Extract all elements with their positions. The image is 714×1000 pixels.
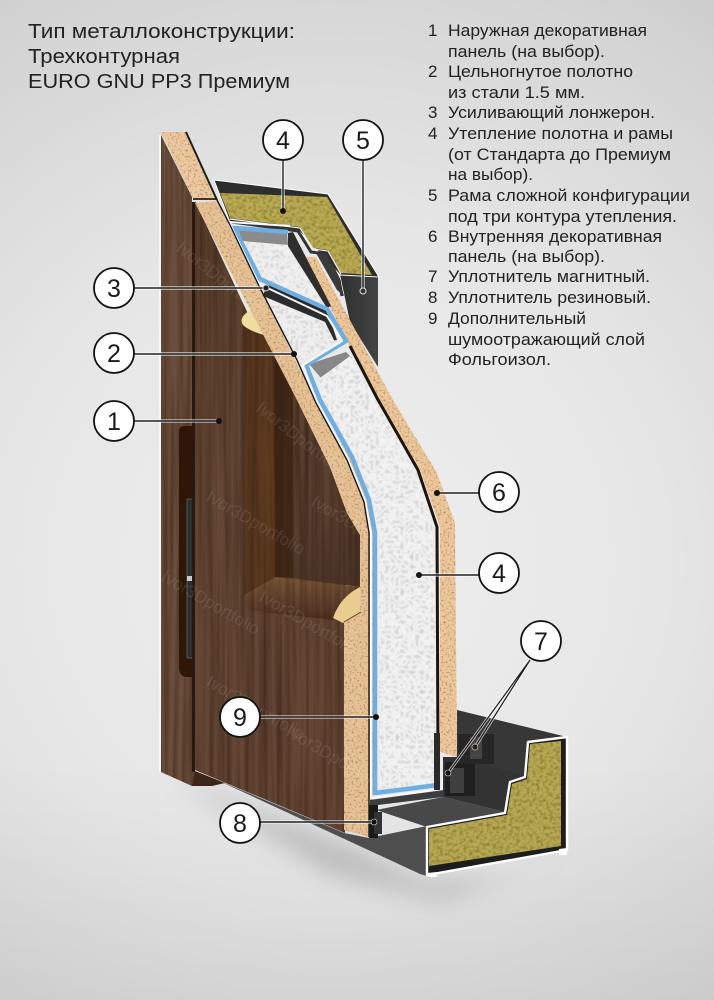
rock wool in frame	[220, 193, 372, 275]
numbered legend: под три контура утепления.	[448, 207, 677, 226]
rebate underside	[192, 771, 225, 786]
lower panel	[293, 390, 360, 587]
watermarks: Ivor3Dportfolio	[283, 722, 388, 794]
left white edge	[159, 135, 161, 772]
threshold seal 8	[369, 805, 382, 838]
callout 5: 5	[356, 127, 370, 155]
title: EURO GNU PP3 Премиум	[28, 71, 290, 93]
numbered legend: 8	[428, 288, 437, 307]
numbered legend	[428, 21, 690, 369]
callout 1: 1	[107, 408, 121, 436]
callout 2	[94, 333, 297, 373]
blue foil layer	[234, 228, 438, 793]
callout 7: 7	[534, 628, 548, 656]
callout 4 top: 4	[276, 127, 290, 155]
threshold back wall	[457, 710, 567, 813]
numbered legend: на выбор).	[448, 165, 533, 184]
lower chamber grey lining	[309, 352, 352, 378]
recess raised strip	[243, 322, 293, 597]
callout 3	[94, 268, 269, 308]
numbered legend: Дополнительный	[448, 309, 586, 328]
numbered legend: Уплотнитель резиновый.	[448, 288, 651, 307]
numbered legend: 5	[428, 186, 437, 205]
frame top rim	[214, 180, 379, 277]
callout 8	[220, 803, 377, 843]
panel shadow above molding	[293, 510, 360, 587]
watermarks: Ivor3Dportfolio	[158, 567, 263, 639]
molding wood cut	[333, 587, 360, 623]
threshold frame	[215, 710, 567, 877]
door leaf face	[192, 201, 360, 833]
watermarks: Ivor3Dportfolio	[253, 398, 351, 481]
callout 9: 9	[233, 704, 247, 732]
hinge	[187, 499, 195, 658]
numbered legend: Усиливающий лонжерон.	[448, 103, 655, 122]
numbered legend: Фольгоизол.	[448, 350, 551, 369]
callout 4 lower	[416, 553, 519, 593]
door side strip	[160, 135, 225, 786]
numbered legend: 4	[428, 124, 437, 143]
callout 4 lower: 4	[492, 560, 506, 588]
top chamber foam	[243, 241, 326, 305]
callout 9	[220, 697, 379, 737]
callout 6	[434, 472, 519, 512]
title: Трехконтурная	[28, 46, 180, 68]
threshold flat step	[376, 797, 505, 827]
threshold seal 7	[445, 734, 494, 796]
numbered legend: панель (на выбор).	[448, 247, 605, 266]
insulation cavity	[217, 200, 444, 837]
title	[28, 21, 295, 93]
callout 2: 2	[107, 340, 121, 368]
numbered legend: Наружная декоративная	[448, 21, 647, 40]
numbered legend: Цельногнутое полотно	[448, 62, 633, 81]
wood face panel	[195, 201, 345, 833]
callout 7	[445, 621, 561, 776]
top chamber grey lining	[238, 230, 288, 245]
title: Тип металлоконструкции:	[28, 21, 295, 43]
upper MDF piece	[161, 132, 215, 198]
numbered legend: из стали 1.5 мм.	[448, 83, 585, 102]
callout 6: 6	[492, 479, 506, 507]
main foam	[320, 356, 436, 788]
watermarks: Ivor3Dportfolio	[203, 672, 308, 744]
white steel edge	[186, 132, 217, 200]
frame top section	[214, 180, 379, 367]
watermarks: Ivor3Dportfolio	[308, 492, 413, 564]
inner steel thicker foot	[434, 733, 440, 790]
frame back wall	[340, 274, 378, 367]
white steel sheet	[229, 222, 444, 798]
middle dark longeron band	[263, 284, 337, 341]
inner dark steel	[350, 346, 438, 752]
middle chamber foam	[264, 297, 335, 360]
outer MDF panel	[161, 132, 373, 837]
numbered legend: шумоотражающий слой	[448, 330, 645, 349]
threshold cross section outline	[427, 737, 567, 875]
numbered legend: 6	[428, 227, 437, 246]
callout 5	[343, 120, 383, 294]
callout 1	[94, 401, 222, 441]
threshold raised step	[443, 757, 525, 812]
threshold outer side	[215, 779, 427, 876]
numbered legend: 2	[428, 62, 437, 81]
numbered legend: Утепление полотна и рамы	[448, 124, 673, 143]
side wood face	[161, 135, 195, 786]
numbered legend: Уплотнитель магнитный.	[448, 267, 650, 286]
frame stepped profile	[230, 219, 341, 274]
numbered legend: 9	[428, 309, 437, 328]
numbered legend: панель (на выбор).	[448, 42, 605, 61]
MDF notch line	[193, 198, 216, 200]
MDF main edge	[195, 201, 373, 837]
upper molding cut	[242, 310, 273, 337]
numbered legend: Внутренняя декоративная	[448, 227, 662, 246]
watermarks: Ivor3Dportfolio	[203, 487, 308, 559]
floor shading	[0, 760, 714, 1000]
inner MDF panel	[305, 257, 457, 757]
callout 4 top	[263, 120, 303, 214]
watermarks	[158, 238, 413, 794]
watermarks: Ivor3Dportfolio	[256, 587, 361, 659]
numbered legend: 1	[428, 21, 437, 40]
callout 3: 3	[107, 275, 121, 303]
callout 8: 8	[233, 810, 247, 838]
threshold feet	[427, 872, 437, 877]
lower molding	[241, 577, 360, 620]
numbered legend: 3	[428, 103, 437, 122]
watermarks: Ivor3Dportfolio	[173, 238, 271, 321]
hinge recess	[179, 426, 195, 677]
threshold rock wool	[429, 741, 561, 866]
numbered legend: 7	[428, 267, 437, 286]
vertical groove	[192, 202, 195, 772]
numbered legend: (от Стандарта до Премиум	[448, 145, 671, 164]
numbered legend: Рама сложной конфигурации	[448, 186, 690, 205]
dark right wall of top chamber	[288, 232, 331, 308]
floor shadow	[170, 775, 570, 900]
